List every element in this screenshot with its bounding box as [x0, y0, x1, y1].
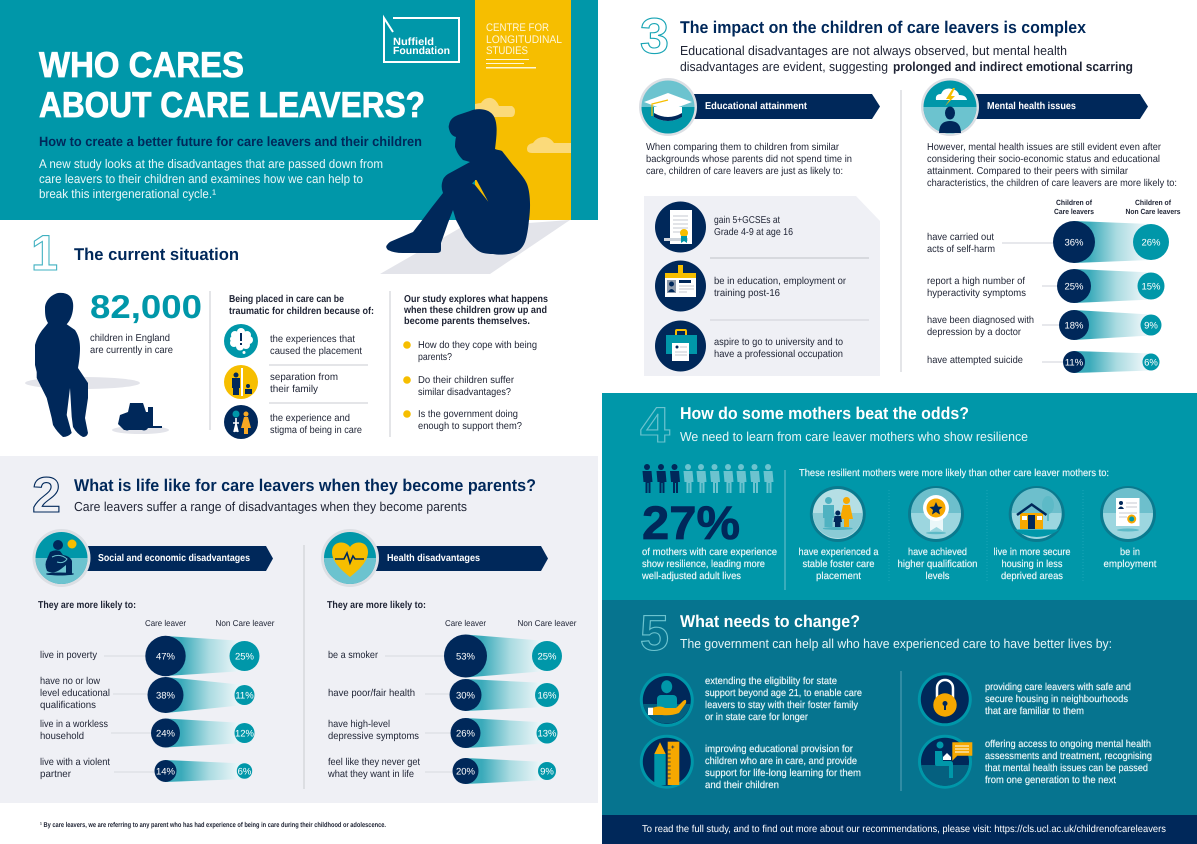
subpanel: mental health issues: Care leavers: [1054, 207, 1094, 216]
chart rows: 14%: [156, 766, 176, 778]
banner: Educational attainment: [705, 101, 808, 112]
intro text: care leavers to their children and examines how we can help to: [39, 172, 363, 186]
illustration: seated boy silhouette: [386, 109, 530, 255]
chart rows: 36%: [1064, 238, 1084, 248]
chart rows: 25%: [235, 652, 255, 662]
text: mental health access: from one generation to the next: [985, 775, 1116, 786]
block: study questions: [403, 294, 548, 432]
stat caption: children in England: [90, 333, 170, 344]
chart rows: 11%: [1065, 358, 1084, 368]
intro text: [646, 142, 852, 177]
subpanel: social and economic disadvantages: Non Care leaver: [216, 618, 275, 628]
chart rows: what they want in life: [327, 769, 414, 780]
chart rows: [40, 636, 260, 782]
chart rows: household: [40, 731, 84, 742]
labels: higher qualification: [898, 559, 978, 570]
icon: graduation cap: [639, 78, 697, 136]
intro text: [927, 142, 1177, 189]
subheading: We need to learn from care leaver mothers who show resilience: [680, 429, 1028, 444]
icon: certificate: [655, 202, 706, 252]
panel: just as likely list: be in education, employment or: [714, 276, 847, 287]
chart rows: 26%: [1141, 238, 1161, 248]
text: safe housing: [985, 682, 1131, 717]
panel: just as likely list: gain 5+GCSEs at: [714, 215, 780, 226]
block: why being in care is traumatic: the experiences that: [270, 334, 355, 345]
heading: The impact on the children of care leavers is complex: [680, 18, 1087, 37]
panel: section 1 current situation: [25, 225, 548, 439]
title: [39, 44, 425, 125]
icon: award rosette: [908, 486, 964, 542]
banner: [972, 94, 1148, 119]
subpanel: social and economic disadvantages: They are more likely to:: [38, 600, 136, 611]
chart rows: 53%: [456, 652, 476, 662]
panel: section 3 impact on children: [639, 8, 1180, 376]
text: improving education: improving educational provision for: [705, 744, 854, 755]
block: why being in care is traumatic: traumatic for children because of:: [229, 306, 374, 317]
block: why being in care is traumatic: Being placed in care can be: [229, 294, 344, 305]
panel: section 5 what needs to change: [602, 600, 1197, 815]
subheading: Educational disadvantages are not always observed, but mental health: [680, 43, 1067, 58]
subheading: prolonged and indirect emotional scarring: [893, 59, 1133, 74]
chart rows: 26%: [456, 728, 476, 740]
text: extending eligibility: extending the eligibility for state: [705, 676, 837, 687]
chart rows: 12%: [235, 728, 255, 740]
block: why being in care is traumatic: the experience and: [270, 413, 350, 424]
icon: seated figure: [32, 529, 90, 587]
chart rows: 25%: [1064, 282, 1084, 292]
subpanel: mental health issues: [921, 78, 1180, 373]
panel: just as likely list: have a professional occupation: [714, 349, 843, 360]
title: ABOUT CARE LEAVERS?: [39, 84, 425, 125]
panel: header: [0, 0, 598, 274]
chart rows: have poor/fair health: [328, 688, 415, 699]
text: mental health access: assessments and treatment, recognising: [985, 751, 1152, 762]
section number 4: 4: [640, 397, 670, 453]
icon: briefcase and CV: [655, 320, 706, 372]
text: safe housing: providing care leavers with safe and: [985, 682, 1131, 693]
block: why being in care is traumatic: separation from: [270, 372, 338, 383]
chart rows: 24%: [156, 728, 176, 740]
logo: Centre for Longitudinal Studies: [486, 22, 562, 68]
subheading: The government can help all who have experienced care to have better lives by:: [680, 636, 1112, 651]
icon: child silhouette with toy: [25, 293, 169, 437]
banner: [86, 546, 273, 571]
block: study questions: similar disadvantages?: [418, 387, 511, 398]
chart rows: feel like they never get: [328, 757, 420, 768]
text: improving education: and their children: [705, 780, 779, 791]
section number 1: 1: [31, 225, 58, 281]
chart rows: 13%: [537, 728, 557, 740]
icon: foster family: [810, 486, 866, 542]
chart rows: have carried out: [927, 232, 994, 243]
footnote: ¹ By care leavers, we are referring to any parent who has had experience of being in care during their childhood or adolescence.: [40, 821, 386, 829]
subpanel: mental health issues: Non Care leavers: [1126, 207, 1180, 216]
subheading: [680, 43, 1133, 74]
chart rows: live in a workless: [40, 719, 108, 730]
stat: 82,000: 82,000: [90, 288, 202, 325]
banner: Social and economic disadvantages: [98, 553, 250, 564]
banner: Health disadvantages: [387, 553, 480, 564]
logo: Nuffield Foundation: Nuffield: [393, 36, 434, 48]
intro text: A new study looks at the disadvantages that are passed down from: [39, 157, 383, 171]
icon: house: [1009, 486, 1065, 542]
text: extending eligibility: [705, 676, 862, 723]
chart rows: 9%: [1144, 320, 1158, 332]
chart rows: 20%: [456, 766, 476, 778]
labels: [798, 547, 1157, 582]
chart rows: 25%: [537, 652, 557, 662]
stat caption: [641, 547, 777, 582]
subpanel: health disadvantages: Non Care leaver: [518, 618, 577, 628]
labels: employment: [1104, 559, 1157, 570]
title: WHO CARES: [39, 44, 244, 85]
chart rows: level educational: [40, 688, 110, 699]
section number 2: 2: [32, 467, 61, 523]
block: study questions: Is the government doing: [418, 409, 518, 420]
stat caption: show resilience, leading more: [642, 559, 765, 570]
stat caption: of mothers with care experience: [642, 547, 777, 558]
subpanel: health disadvantages: Care leaver: [445, 618, 486, 628]
icon: ID badge: [655, 260, 706, 312]
intro text: characteristics, the children of care leavers are more likely to:: [927, 178, 1177, 189]
chart rows: have no or low: [40, 676, 101, 687]
chart rows: have attempted suicide: [927, 355, 1023, 366]
chart rows: 30%: [456, 690, 476, 702]
block: study questions: enough to support them?: [418, 421, 522, 432]
labels: have achieved: [908, 547, 967, 558]
text: safe housing: that are familiar to them: [985, 706, 1084, 717]
subpanel: mental health issues: Children of: [1056, 198, 1092, 207]
block: why being in care is traumatic: stigma of being in care: [270, 425, 362, 436]
block: study questions: when these children grow up and: [403, 305, 547, 316]
chart rows: qualifications: [40, 700, 96, 711]
panel: just as likely list: aspire to go to university and to: [714, 337, 843, 348]
section number 3: 3: [640, 8, 669, 64]
heading: What needs to change?: [680, 612, 860, 631]
icon: heart: [321, 529, 379, 587]
chart rows: report a high number of: [927, 276, 1025, 287]
heading: How do some mothers beat the odds?: [680, 404, 969, 423]
banner: [690, 94, 880, 119]
logo: Centre for Longitudinal Studies: CENTRE FOR: [486, 22, 549, 34]
heading: The current situation: [74, 245, 239, 264]
chart rows: 47%: [156, 652, 176, 662]
labels: live in more secure: [994, 547, 1071, 558]
chart rows: 9%: [540, 766, 554, 778]
chart rows: partner: [40, 769, 72, 780]
intro text: When comparing them to children from similar: [646, 142, 840, 153]
intro text: attainment. Compared to their peers with similar: [927, 166, 1129, 177]
icon: padlock: [918, 672, 972, 726]
icon: separation: [224, 365, 258, 399]
icon: caring hand: [640, 673, 694, 727]
icon: pencil and ruler: [640, 735, 694, 789]
logo: Centre for Longitudinal Studies: STUDIES: [486, 45, 528, 57]
banner: [375, 546, 548, 571]
subpanel: educational attainment: [639, 78, 880, 376]
chart rows: 11%: [235, 690, 254, 702]
logo: Nuffield Foundation: [384, 18, 459, 62]
intro text: These resilient mothers were more likely than other care leaver mothers to:: [799, 468, 1109, 479]
icon: thought bubble: [224, 324, 258, 358]
icon: stigma: [224, 405, 258, 439]
chart rows: 15%: [1141, 282, 1161, 292]
labels: stable foster care: [802, 559, 875, 570]
labels: be in: [1120, 547, 1140, 558]
footer bar: [602, 815, 1197, 844]
text: improving education: [705, 744, 861, 791]
subheading: Care leavers suffer a range of disadvantages when they become parents: [74, 499, 467, 514]
stat: 27%: 27%: [642, 496, 740, 549]
chart rows: depression by a doctor: [927, 327, 1022, 338]
panel: section 4 mothers beating the odds: [602, 393, 1197, 600]
labels: levels: [926, 571, 950, 582]
text: mental health access: that mental health issues can be passed: [985, 763, 1148, 774]
banner: Mental health issues: [987, 101, 1076, 112]
chart rows: [327, 634, 562, 784]
stat caption: are currently in care: [90, 345, 173, 356]
intro text: break this intergenerational cycle.¹: [39, 187, 216, 201]
block: why being in care is traumatic: [224, 294, 374, 439]
chart rows: acts of self-harm: [927, 244, 995, 255]
logo: Nuffield Foundation: Foundation: [393, 45, 450, 57]
intro text: backgrounds whose parents did not spend time in: [646, 154, 852, 165]
subpanel: social and economic disadvantages: [32, 529, 275, 782]
heading: What is life like for care leavers when they become parents?: [74, 476, 536, 495]
chart rows: have been diagnosed with: [927, 315, 1034, 326]
text: improving education: children who are in care, and provide: [705, 756, 857, 767]
subpanel: health disadvantages: They are more likely to:: [327, 600, 426, 611]
text: mental health access: offering access to ongoing mental health: [985, 739, 1151, 750]
text: extending eligibility: or in state care for longer: [705, 712, 809, 723]
chart rows: 38%: [156, 690, 176, 702]
panel: just as likely list: [644, 196, 880, 376]
stat caption: [90, 333, 173, 356]
panel: section 2 life as parents: [0, 456, 598, 803]
text: mental health access: [985, 739, 1152, 786]
labels: deprived areas: [1001, 571, 1063, 582]
block: study questions: Our study explores what happens: [404, 294, 548, 305]
block: why being in care is traumatic: caused the placement: [270, 346, 362, 357]
block: study questions: become parents themselves.: [404, 316, 530, 327]
labels: housing in less: [1002, 559, 1062, 570]
panel: just as likely list: training post-16: [714, 288, 780, 299]
text: extending eligibility: support beyond age 21, to enable care: [705, 688, 862, 699]
block: study questions: How do they cope with being: [418, 340, 537, 351]
chart rows: live with a violent: [40, 757, 110, 768]
footer bar: To read the full study, and to find out more about our recommendations, please visit: https://cls.ucl.ac.uk/childrenofcareleavers: [642, 824, 1166, 835]
subheading: disadvantages are evident, suggesting: [680, 59, 888, 74]
subtitle: How to create a better future for care leavers and their children: [39, 134, 422, 149]
block: study questions: parents?: [418, 352, 452, 363]
chart rows: depressive symptoms: [328, 731, 419, 742]
subpanel: mental health issues: Children of: [1135, 198, 1171, 207]
pictogram: 3 in 10 mothers: [642, 464, 774, 493]
icon: pencil and ruler: +: [671, 745, 675, 751]
intro text: [39, 157, 383, 201]
text: safe housing: secure housing in neighbourhoods: [985, 694, 1128, 705]
text: extending eligibility: leavers to stay with their foster family: [705, 700, 858, 711]
chart rows: 6%: [238, 766, 252, 778]
chart rows: 6%: [1144, 358, 1158, 368]
icon: employment document: [1100, 486, 1156, 542]
panel: just as likely list: Grade 4-9 at age 16: [714, 227, 793, 238]
subpanel: health disadvantages: [321, 529, 577, 784]
chart rows: 16%: [537, 690, 557, 702]
block: why being in care is traumatic: their family: [270, 384, 318, 395]
intro text: However, mental health issues are still evident even after: [927, 142, 1162, 153]
stat caption: well-adjusted adult lives: [641, 571, 741, 582]
intro text: care, children of care leavers are just as likely to:: [646, 166, 843, 177]
icon: person with speech bubble: [918, 735, 972, 789]
icon: storm cloud over head: [921, 78, 979, 136]
logo: Centre for Longitudinal Studies: LONGITUDINAL: [486, 34, 562, 46]
subpanel: social and economic disadvantages: Care leaver: [145, 618, 186, 628]
text: improving education: support for life-long learning for them: [705, 768, 861, 779]
intro text: considering their socio-economic status and educational: [927, 154, 1160, 165]
labels: have experienced a: [798, 547, 879, 558]
section number 5: 5: [640, 605, 669, 661]
chart rows: live in poverty: [40, 650, 97, 661]
chart rows: have high-level: [328, 719, 390, 730]
chart rows: 18%: [1064, 320, 1084, 332]
block: study questions: Do their children suffer: [418, 375, 515, 386]
chart rows: [927, 221, 1169, 373]
chart rows: be a smoker: [328, 650, 379, 661]
labels: placement: [816, 571, 861, 582]
chart rows: hyperactivity symptoms: [927, 288, 1026, 299]
